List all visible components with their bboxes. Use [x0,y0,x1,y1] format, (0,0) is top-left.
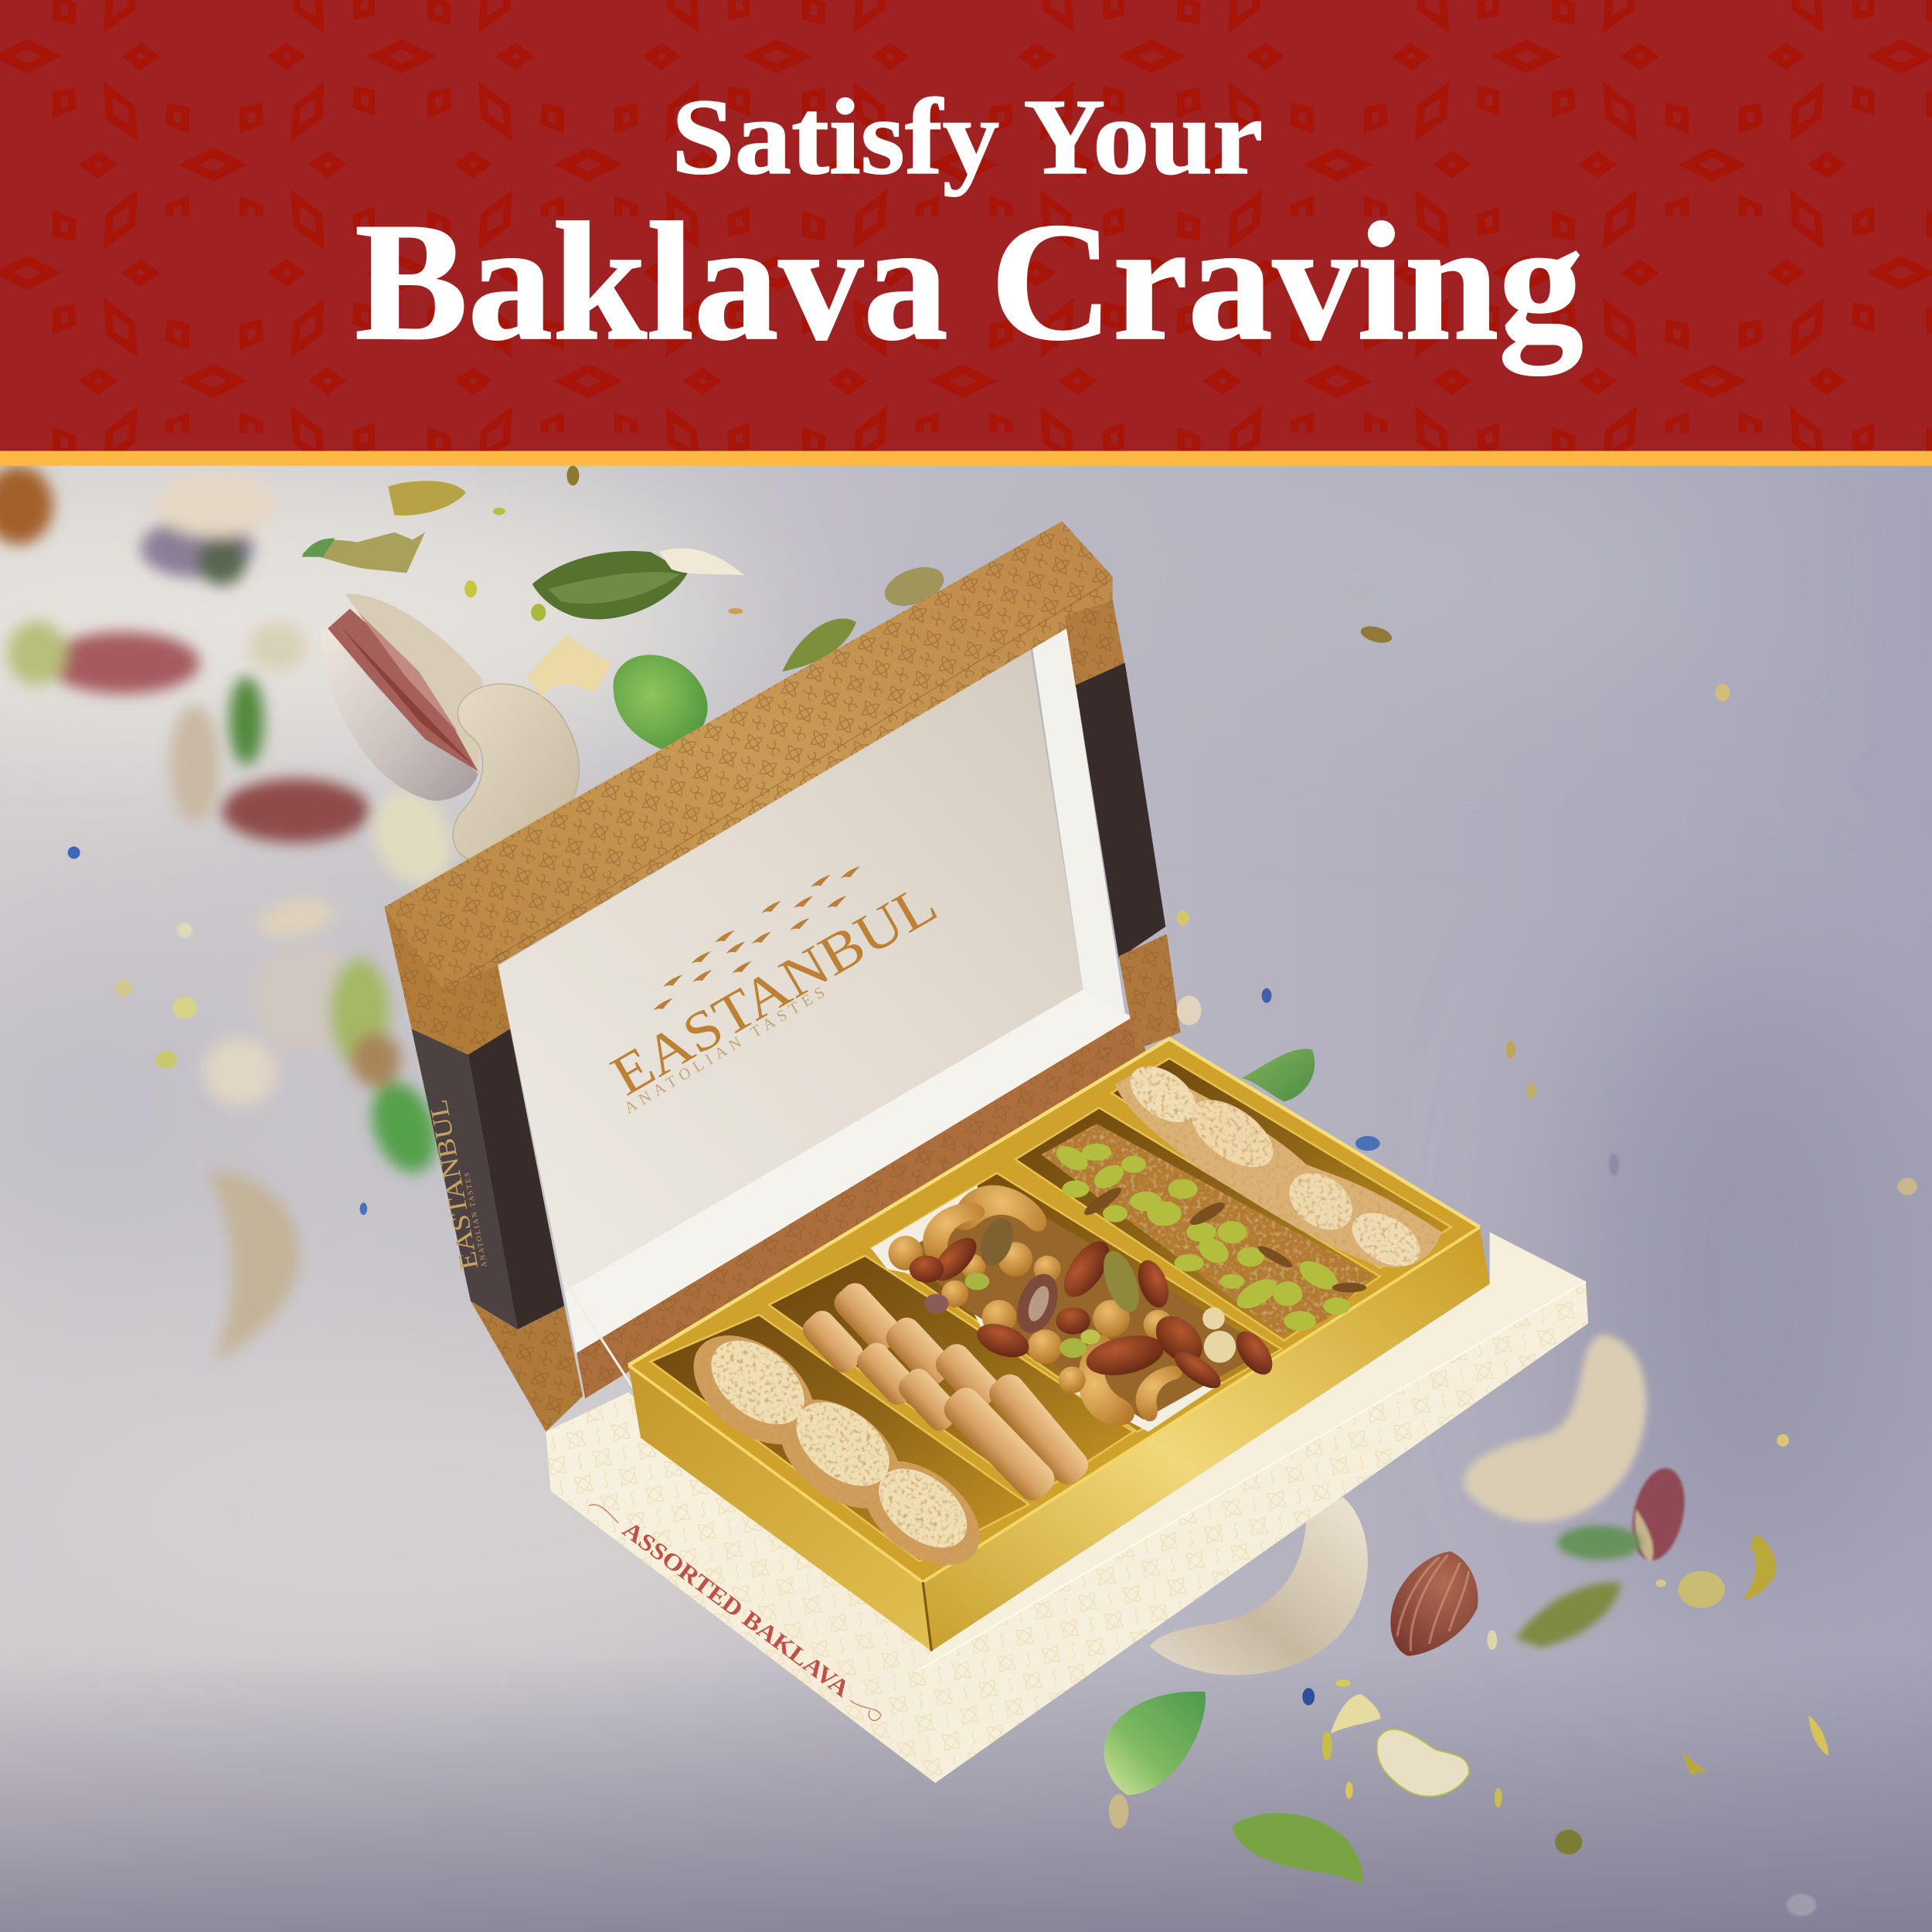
lid inner white return [1030,612,1125,1013]
icon: green pistachio kernel [614,655,708,754]
box base: cream sleeve [546,1232,1588,1783]
title: line two: Baklava Craving [355,189,1583,376]
icon: cashew piece [1377,1730,1469,1796]
icon: blurred green pistachio sliver [1515,1583,1621,1648]
title: line one: Satisfy Your [672,77,1263,197]
blurred nuts: upper left background [0,466,467,1362]
compartment: coconut baklava rounds [673,1314,999,1586]
left pillar brand text: EASTANBUL [424,1097,484,1272]
icon: dark green leaf [532,548,744,619]
right pillar: lower wrap [1119,934,1180,1049]
icon: yellow nut pieces right [1656,1534,1776,1608]
right pillar: dark band [1076,663,1165,958]
box lid: open lid with patterned frame [384,521,1180,1476]
left pillar: lower gold wrap [471,1301,583,1432]
icon: green leaf upper right [1242,1049,1315,1101]
icon: cream chips and flecks [302,466,949,697]
banner: red patterned header [0,0,1932,451]
icon: green leaf bottom [1232,1813,1363,1885]
icon: cashew behind box [1150,1497,1368,1675]
tray left wall [628,1366,931,1651]
left pillar: dark band outer face [412,1029,518,1329]
brand logo: EASTANBUL [600,872,947,1107]
icon: almond [1390,1551,1478,1656]
compartment: pistachio baklava [1041,1124,1374,1335]
icon: green leaf lower [1104,1692,1206,1795]
product label: ASSORTED BAKLAVA [617,1516,855,1702]
lid top frame [384,521,1113,989]
compartment: coconut rolls [1115,1055,1441,1277]
lid inner cream panel [498,648,1083,1291]
lid hinge strip [577,1016,1146,1399]
gold divider band [0,451,1932,467]
icon: cashew [453,684,579,860]
icon: pistachio shell [321,594,483,801]
base left face [546,1393,935,1783]
gold tray [628,1039,1490,1651]
product label [589,1505,881,1720]
tray top rim [628,1039,1480,1582]
compartment: pastry rolls [798,1277,1094,1506]
photo background: soft grey-lilac gradient [0,466,1932,1932]
icon: blurred green fleck [1557,1526,1641,1560]
icon: blurred cashew right [1464,1335,1646,1522]
base front-right face [916,1232,1588,1783]
brand logo: ANATOLIAN TASTES [621,984,828,1117]
compartment wells [651,1059,1451,1561]
left pillar: upper gold wrap [384,906,510,1055]
icon: blurred pistachio red [1624,1464,1692,1565]
icon: pale chip [1331,1694,1380,1733]
right pillar: upper wrap [1065,600,1125,688]
left pillar brand text: ANATOLIAN TASTES [463,1172,489,1268]
paper cup edges [871,1185,1223,1432]
left pillar: dark band inner face [468,1029,564,1329]
lid inner bottom strip [564,989,1134,1355]
compartment: mixed nuts [871,1165,1280,1432]
tray front wall [923,1227,1490,1651]
small flying chips [68,624,1917,1916]
